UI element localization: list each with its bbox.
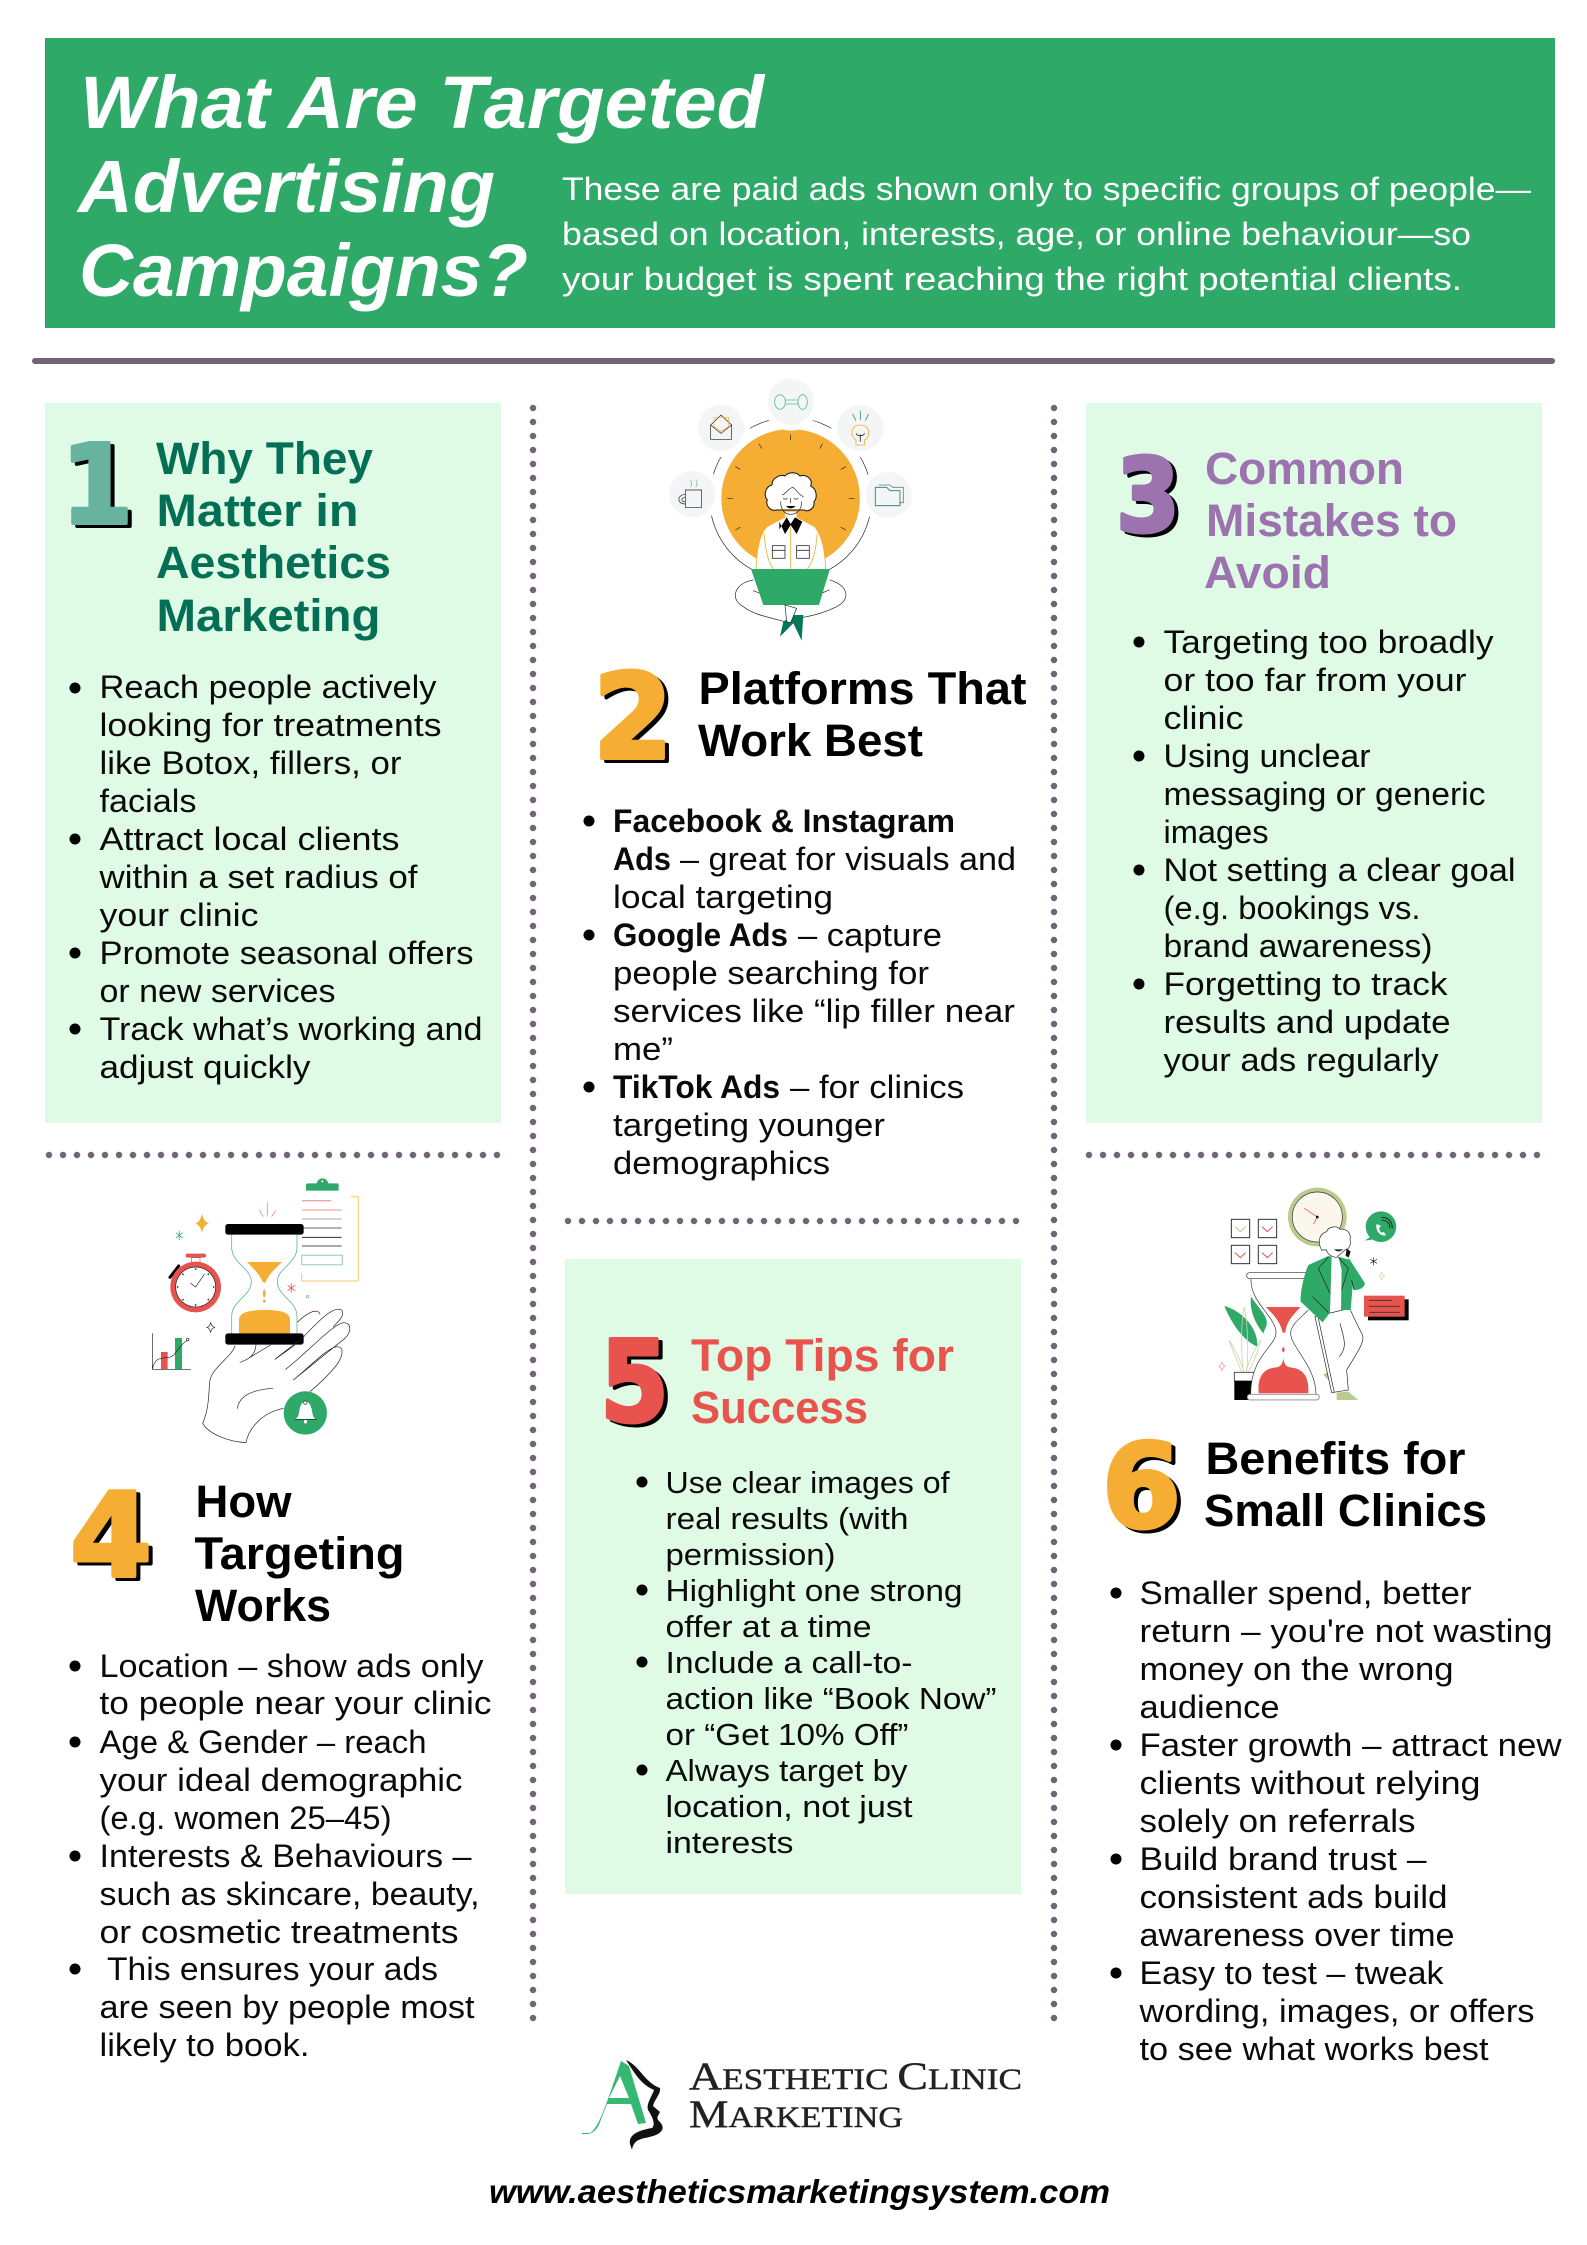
bullet list 5: offer at a time [666, 1610, 872, 1644]
intro text [562, 171, 1531, 297]
bullet list 4 [70, 1648, 491, 2063]
website url: www.aestheticsmarketingsystem.com [489, 2173, 1110, 2210]
number 2: 2 [593, 648, 673, 786]
bullet list 4: to people near your clinic [100, 1685, 491, 1721]
bullet list 6: Faster growth – attract new [1140, 1727, 1562, 1763]
bullet list 1: like Botox, fillers, or [100, 745, 402, 781]
bullet list 2 [584, 803, 1016, 1181]
bullet list 2: Facebook & Instagram [613, 803, 955, 839]
heading 1: Aesthetics [156, 537, 391, 588]
bullet list 6: Easy to test – tweak [1140, 1955, 1445, 1991]
bullet list 4: (e.g. women 25–45) [100, 1800, 392, 1836]
panel: section 3 common mistakes [1086, 403, 1542, 1123]
icon: light bulb [852, 411, 869, 445]
intro text: These are paid ads shown only to specific groups of people— [562, 171, 1531, 207]
bullet list 3: your ads regularly [1164, 1042, 1438, 1078]
stopwatch [170, 1254, 221, 1312]
title: Advertising [76, 145, 495, 228]
bullet list 3: images [1164, 814, 1268, 850]
illustration: person with laptop and clock [666, 376, 915, 641]
bullet list 5: or “Get 10% Off” [666, 1718, 908, 1752]
icon: envelope [711, 415, 732, 439]
bullet list 6: Smaller spend, better [1140, 1575, 1472, 1611]
bullet list 6: return – you're not wasting [1140, 1613, 1552, 1649]
bullet list 6: to see what works best [1140, 2031, 1489, 2067]
heading 5: Top Tips for [691, 1330, 954, 1381]
mini chart [152, 1333, 191, 1369]
bullet list 4: likely to book. [100, 2027, 310, 2063]
bullet list 6: clients without relying [1140, 1765, 1480, 1801]
number 5: 5 [600, 1318, 669, 1448]
bullet list 5: Always target by [666, 1754, 908, 1788]
title: Campaigns? [79, 229, 528, 312]
heading 4: Targeting [194, 1528, 404, 1579]
heading 6: Small Clinics [1204, 1485, 1487, 1536]
heading 6 [1204, 1433, 1487, 1536]
bullet list 1: facials [100, 783, 196, 819]
heading 4: How [196, 1476, 292, 1527]
bullet list 3: (e.g. bookings vs. [1164, 890, 1420, 926]
bullet list 2: local targeting [613, 879, 833, 915]
bullet list 2: TikTok Ads [613, 1069, 780, 1105]
bullet list 2: targeting younger [613, 1107, 885, 1143]
heading 1: Why They [156, 433, 373, 484]
heading 3: Common [1205, 443, 1404, 494]
bullet list 2: services like “lip filler near [613, 993, 1015, 1029]
heading 1 [156, 433, 391, 641]
heading 5 [691, 1330, 954, 1433]
bullet list 6: awareness over time [1140, 1917, 1454, 1953]
bullet list 6: money on the wrong [1140, 1651, 1454, 1687]
panel: section 1 why they matter [45, 403, 501, 1123]
chat bubble phone icon [1365, 1211, 1396, 1242]
number 6: 6 [1102, 1420, 1181, 1555]
bullet list 2: – capture [798, 917, 942, 953]
bullet list 3: results and update [1164, 1004, 1450, 1040]
number 4: 4 [70, 1469, 152, 1604]
bullet list 4: or cosmetic treatments [100, 1914, 458, 1950]
logo wordmark: MARKETING [689, 2093, 903, 2136]
title: What Are Targeted [80, 61, 766, 144]
bullet list 2: – great for visuals and [680, 841, 1016, 877]
title [76, 61, 766, 312]
heading 5: Success [691, 1382, 868, 1433]
icon: coffee cup [679, 480, 702, 507]
bullet list 3: or too far from your [1164, 662, 1467, 698]
bullet list 4: are seen by people most [100, 1989, 475, 2025]
bullet list 1: Reach people actively [100, 669, 436, 705]
red note card [1364, 1296, 1409, 1320]
bullet list 5: Include a call-to- [666, 1646, 912, 1680]
bullet list 3: Using unclear [1164, 738, 1371, 774]
bullet list 4: your ideal demographic [100, 1762, 462, 1798]
logo [582, 2055, 1022, 2150]
bullet list 5 [636, 1466, 996, 1860]
bullet list 5: location, not just [666, 1790, 913, 1824]
bullet list 3: messaging or generic [1164, 776, 1486, 812]
heading 3: Avoid [1204, 547, 1331, 598]
bullet list 3: Forgetting to track [1164, 966, 1449, 1002]
section 2 platforms [584, 648, 1027, 1181]
bullet list 4: This ensures your ads [107, 1951, 438, 1987]
heading 6: Benefits for [1206, 1433, 1466, 1484]
bullet list 6 [1110, 1575, 1562, 2067]
bullet list 2: Google Ads [613, 917, 788, 953]
bullet list 3: Not setting a clear goal [1164, 852, 1516, 888]
bullet list 1: looking for treatments [100, 707, 442, 743]
bullet list 5: action like “Book Now” [666, 1682, 996, 1716]
logo wordmark: AESTHETIC CLINIC [689, 2055, 1022, 2098]
big hourglass [1247, 1273, 1319, 1400]
section 6 benefits [1102, 1420, 1562, 2067]
bullet list 1: Track what’s working and [100, 1011, 483, 1047]
bullet list 5: interests [666, 1826, 794, 1860]
bullet list 2: people searching for [613, 955, 929, 991]
heading 4: Works [195, 1580, 331, 1631]
bullet list 1: adjust quickly [100, 1049, 310, 1085]
hand [203, 1309, 350, 1443]
bullet list 6: Build brand trust – [1140, 1841, 1427, 1877]
heading 2 [698, 663, 1027, 766]
heading 3: Mistakes to [1206, 495, 1457, 546]
bullet list 1: or new services [100, 973, 336, 1009]
panel: section 5 top tips [565, 1259, 1021, 1894]
intro text: based on location, interests, age, or online behaviour—so [562, 216, 1471, 252]
bullet list 4: Age & Gender – reach [100, 1724, 426, 1760]
bullet list 3: clinic [1164, 700, 1244, 736]
bullet list 6: wording, images, or offers [1138, 1993, 1534, 2029]
icon: logo A with face profile [582, 2060, 663, 2150]
bullet list 3: Targeting too broadly [1164, 624, 1494, 660]
bullet list 5: permission) [666, 1538, 836, 1572]
bullet list 3: brand awareness) [1164, 928, 1432, 964]
bullet list 2: me” [613, 1031, 673, 1067]
header banner [45, 38, 1555, 328]
bullet list 1: your clinic [100, 897, 258, 933]
heading 1: Marketing [156, 590, 380, 641]
illustration: person on phone with clock and hourglass [1219, 1188, 1409, 1400]
heading 4 [194, 1476, 404, 1631]
bullet list 1 [70, 669, 483, 1085]
plant [1224, 1297, 1267, 1400]
heading 1: Matter in [156, 485, 358, 536]
bullet list 1: within a set radius of [98, 859, 418, 895]
logo wordmark [689, 2055, 1022, 2136]
bullet list 3 [1134, 624, 1516, 1078]
bullet list 2: Ads [613, 841, 671, 877]
bullet list 5: Highlight one strong [666, 1574, 962, 1608]
bullet list 4: Location – show ads only [100, 1648, 484, 1684]
icon: folder [875, 485, 903, 506]
bullet list 2: demographics [613, 1145, 830, 1181]
heading 3 [1204, 443, 1457, 598]
bullet list 1: Promote seasonal offers [100, 935, 474, 971]
bullet list 5: real results (with [666, 1502, 908, 1536]
section 4 how targeting works [70, 1469, 491, 2063]
bullet list 4: such as skincare, beauty, [100, 1876, 480, 1912]
bullet list 5: Use clear images of [666, 1466, 950, 1500]
intro text: your budget is spent reaching the right potential clients. [562, 261, 1462, 297]
heading 2: Platforms That [698, 663, 1027, 714]
man [1301, 1227, 1365, 1400]
bell badge [284, 1391, 327, 1435]
bullet list 6: solely on referrals [1140, 1803, 1416, 1839]
bullet list 4: Interests & Behaviours – [100, 1838, 472, 1874]
bullet list 1: Attract local clients [100, 821, 400, 857]
number 1: 1 [61, 421, 133, 549]
icon: dumbbell [775, 395, 807, 409]
heading 2: Work Best [698, 715, 923, 766]
number 3: 3 [1116, 437, 1180, 556]
bullet list 2: – for clinics [790, 1069, 964, 1105]
bullet list 6: audience [1140, 1689, 1280, 1725]
bullet list 6: consistent ads build [1140, 1879, 1448, 1915]
illustration: hourglass on hand [152, 1178, 358, 1443]
